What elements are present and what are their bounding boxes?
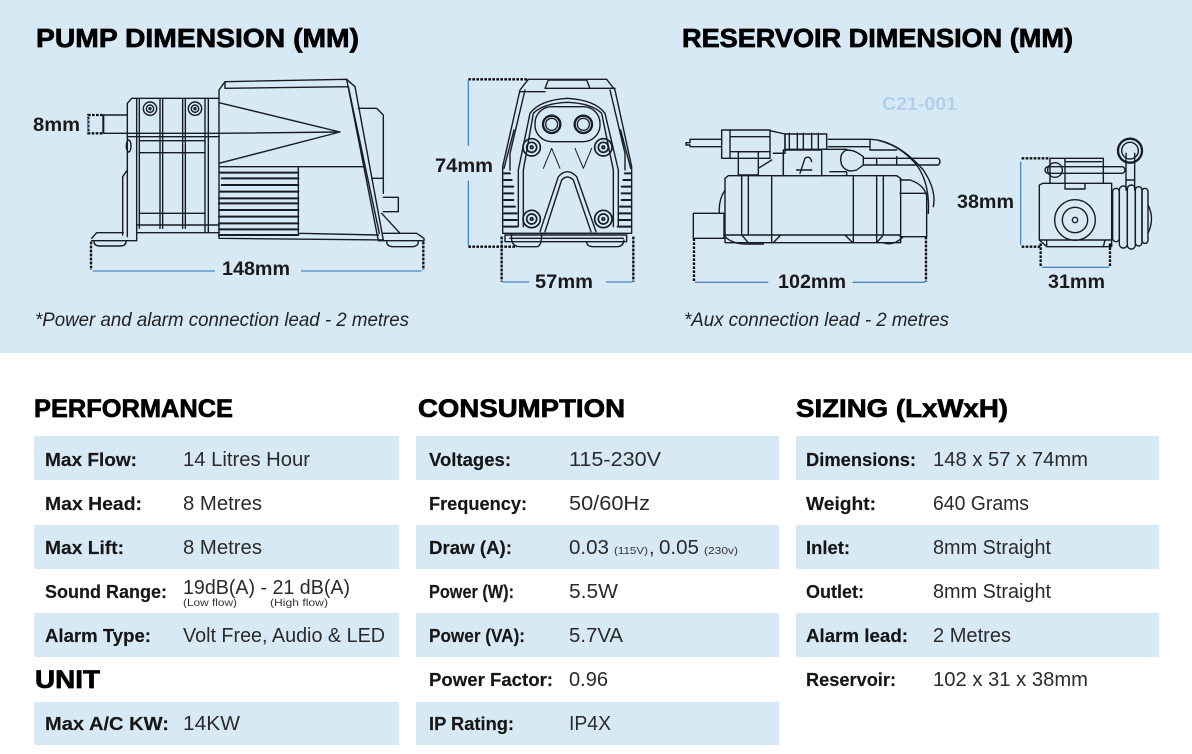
diagram: pump front view — [468, 79, 633, 282]
row: max flow — [34, 436, 399, 480]
row: inlet: Inlet: — [806, 537, 850, 558]
reservoir side outline — [686, 130, 940, 244]
row: draw: Draw (A): — [429, 537, 512, 558]
row: reservoir: 102 x 31 x 38mm — [933, 669, 1088, 691]
panel: consumption — [416, 395, 779, 745]
row: draw: (115V) — [614, 545, 648, 557]
row: alarm type — [34, 613, 399, 657]
part code: C21-001 — [882, 94, 957, 114]
reservoir end outline — [1039, 139, 1151, 249]
row: sound range: (Low flow) — [183, 597, 237, 609]
row: reservoir: Reservoir: — [806, 669, 896, 690]
height 74mm dimension marker — [468, 79, 528, 247]
row: alarm type: Alarm Type: — [45, 625, 151, 646]
row: draw: , — [649, 537, 655, 559]
row: outlet: Outlet: — [806, 581, 864, 602]
row: dimensions — [796, 436, 1159, 480]
label: 148mm: 148mm — [222, 259, 290, 280]
label: 31mm: 31mm — [1048, 272, 1105, 293]
panel: unit — [34, 666, 399, 745]
row: weight — [806, 493, 1029, 515]
ports — [543, 116, 592, 133]
row: max head — [45, 493, 262, 515]
length 148mm dimension marker — [91, 242, 423, 271]
row: power va — [416, 613, 779, 657]
width 31mm dimension marker — [1041, 243, 1110, 267]
row: sound range: 19dB(A) - 21 dB(A) — [183, 577, 350, 599]
row: max flow: Max Flow: — [45, 449, 137, 470]
row: outlet: 8mm Straight — [933, 581, 1051, 603]
row: max head: Max Head: — [45, 493, 142, 514]
row: dimensions: Dimensions: — [806, 449, 916, 470]
width 57mm dimension marker — [502, 237, 633, 282]
row: sound range: Sound Range: — [45, 581, 167, 602]
row: power w: Power (W): — [429, 581, 514, 602]
row: power w: 5.5W — [569, 581, 618, 603]
heading: consumption: CONSUMPTION — [418, 395, 625, 423]
row: max a/c kw: Max A/C KW: — [45, 713, 169, 734]
row: draw: 0.03 — [569, 537, 609, 559]
row: max a/c kw: 14KW — [183, 713, 240, 735]
note: power lead: *Power and alarm connection lead - 2 metres — [35, 310, 409, 331]
row: frequency: 50/60Hz — [569, 493, 650, 515]
row: outlet — [806, 581, 1051, 603]
panel: dimensions background — [0, 0, 1192, 353]
label: 102mm: 102mm — [778, 272, 846, 293]
row: inlet: 8mm Straight — [933, 537, 1051, 559]
row: max flow: 14 Litres Hour — [183, 449, 310, 471]
length 102mm dimension marker — [694, 237, 926, 282]
row: ip rating: IP4X — [569, 713, 611, 735]
row: power factor: 0.96 — [569, 669, 608, 691]
row: draw: (230v) — [704, 545, 738, 557]
pump front outline — [503, 79, 632, 247]
row: alarm lead: Alarm lead: — [806, 625, 908, 646]
row: max lift: 8 Metres — [183, 537, 262, 559]
row: power va: 5.7VA — [569, 625, 624, 647]
screws — [523, 139, 612, 228]
panel: sizing — [796, 395, 1159, 691]
diagram: pump side view — [88, 79, 424, 271]
row: voltages — [416, 436, 779, 480]
row: draw — [416, 525, 779, 569]
heading: sizing: SIZING (LxWxH) — [796, 395, 1008, 423]
heading: performance: PERFORMANCE — [34, 395, 233, 423]
row: draw: 0.05 — [659, 537, 699, 559]
diagram: reservoir side view — [686, 130, 1151, 282]
row: frequency: Frequency: — [429, 493, 527, 514]
pump side outline — [92, 79, 424, 247]
row: alarm lead: 2 Metres — [933, 625, 1011, 647]
label: 38mm: 38mm — [957, 192, 1014, 213]
panel: performance — [34, 395, 399, 657]
row: weight: Weight: — [806, 493, 876, 514]
label: 8mm: 8mm — [33, 115, 80, 136]
label: 74mm: 74mm — [435, 156, 493, 177]
row: alarm lead — [796, 613, 1159, 657]
row: voltages: 115-230V — [569, 449, 662, 471]
row: power va: Power (VA): — [429, 625, 525, 646]
row: dimensions: 148 x 57 x 74mm — [933, 449, 1088, 471]
row: reservoir — [806, 669, 1088, 691]
label: 57mm: 57mm — [535, 272, 593, 293]
row: weight: 640 Grams — [933, 493, 1029, 515]
row: inlet — [796, 525, 1159, 569]
note: aux lead: *Aux connection lead - 2 metres — [684, 310, 949, 331]
row: ip rating: IP Rating: — [429, 713, 514, 734]
inlet 8mm dimension marker — [88, 115, 103, 133]
row: max lift: Max Lift: — [45, 537, 124, 558]
height 38mm dimension marker — [1021, 158, 1050, 247]
row: alarm type: Volt Free, Audio & LED — [183, 625, 385, 647]
row: max lift — [34, 525, 399, 569]
row: sound range: (High flow) — [270, 597, 328, 609]
row: power w — [429, 581, 618, 603]
heading: reservoir dimension: RESERVOIR DIMENSION (MM) — [682, 23, 1073, 53]
row: frequency — [429, 493, 650, 515]
row: voltages: Voltages: — [429, 449, 511, 470]
row: power factor — [429, 669, 608, 691]
row: max head: 8 Metres — [183, 493, 262, 515]
heading: pump dimension: PUMP DIMENSION (MM) — [36, 23, 359, 53]
heading: unit: UNIT — [35, 666, 100, 694]
row: power factor: Power Factor: — [429, 669, 553, 690]
row: ip rating — [416, 702, 779, 745]
row: sound range — [45, 577, 350, 609]
row: max a/c kw — [34, 702, 399, 745]
